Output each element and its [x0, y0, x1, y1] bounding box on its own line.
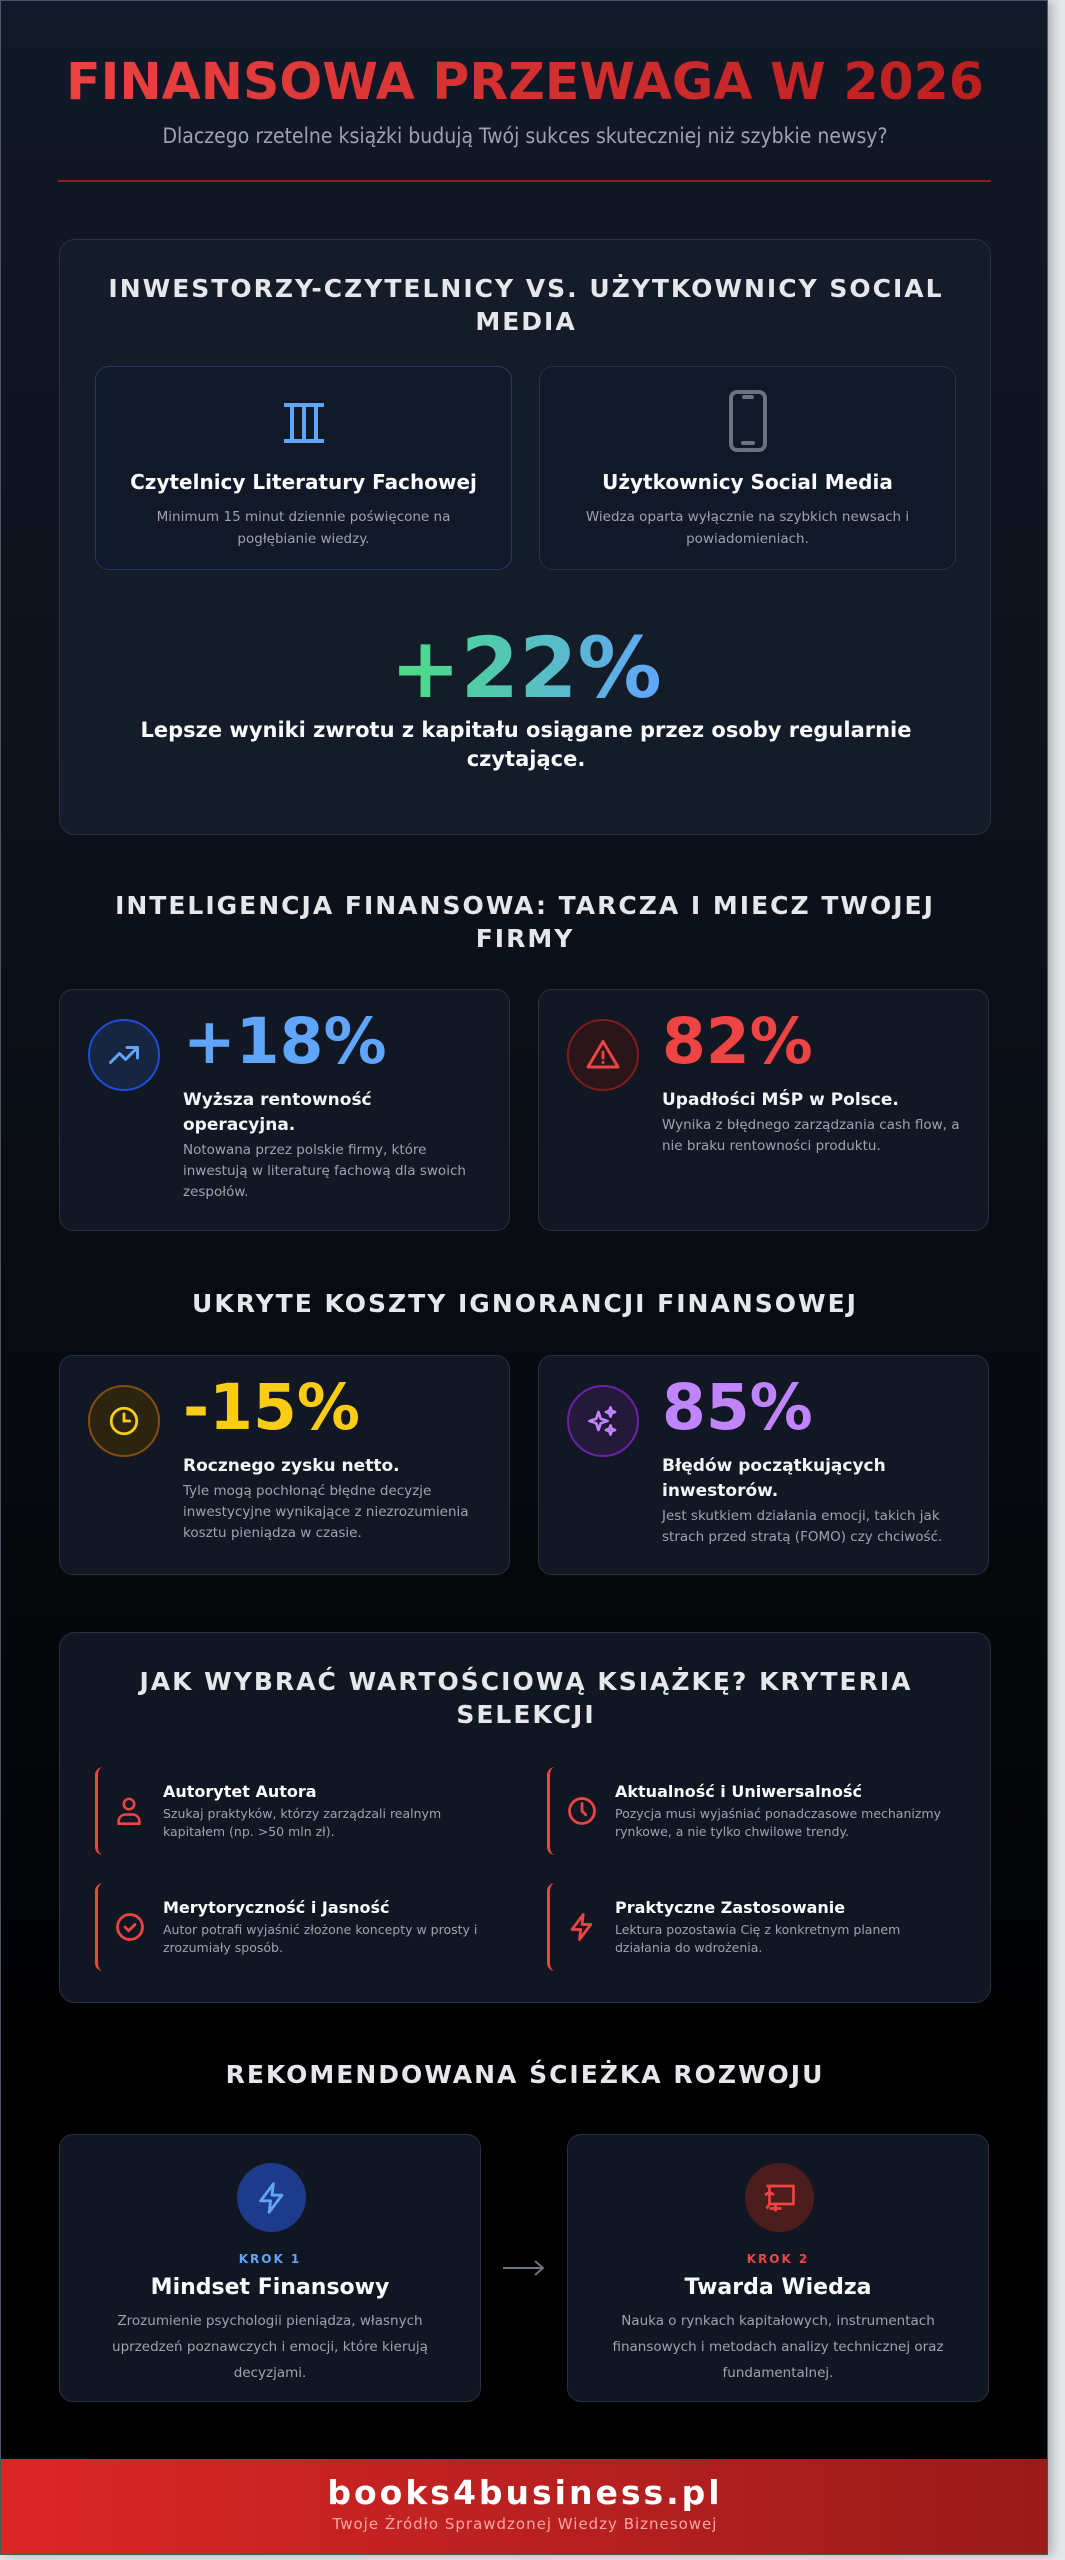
card: 82%	[538, 989, 989, 1231]
criterion: author: Szukaj praktyków, którzy zarządzali realnym kapitałem (np. >50 mln zł).	[163, 1806, 441, 1839]
icon: columns	[284, 403, 324, 443]
panel: criteria	[59, 1632, 991, 2003]
icon: clock	[88, 1385, 160, 1457]
step 2 card: KROK 2	[747, 2252, 809, 2266]
card: +18%: Wyższa rentowność	[183, 1090, 372, 1110]
heading: section 5: REKOMENDOWANA ŚCIEŻKA ROZWOJU	[226, 2060, 824, 2089]
criterion: timeliness: Pozycja musi wyjaśniać ponadczasowe mechanizmy rynkowe, a nie tylko chwilowe trendy.	[615, 1806, 941, 1839]
criterion: timeliness	[547, 1767, 947, 1855]
criterion: clarity: Autor potrafi wyjaśnić złożone koncepty w prosty i zrozumiały sposób.	[163, 1922, 477, 1955]
step 2 card: Twarda Wiedza	[684, 2275, 872, 2300]
step 1 card: KROK 1	[239, 2252, 301, 2266]
card: +18%: +18%	[183, 1005, 387, 1078]
heading: INWESTORZY-CZYTELNICY VS. UŻYTKOWNICY SOCIAL MEDIA	[108, 274, 944, 336]
icon: phone	[729, 390, 767, 452]
criterion: clarity: Merytoryczność i Jasność	[163, 1898, 390, 1917]
criterion: practical: Lektura pozostawia Cię z konkretnym planem działania do wdrożenia.	[615, 1922, 900, 1955]
step 1 card	[59, 2134, 481, 2402]
icon: sparkles	[567, 1385, 639, 1457]
icon: trend	[88, 1019, 160, 1091]
card: readers: Czytelnicy Literatury Fachowej	[130, 470, 477, 494]
icon: warning	[567, 1019, 639, 1091]
heading: JAK WYBRAĆ WARTOŚCIOWĄ KSIĄŻKĘ? KRYTERIA SELEKCJI	[139, 1667, 913, 1729]
stat: +22%: Lepsze wyniki zwrotu z kapitału osiągane przez osoby regularnie czytające.	[140, 718, 912, 771]
heading: section 3: UKRYTE KOSZTY IGNORANCJI FINANSOWEJ	[192, 1289, 858, 1318]
card: 82%: Upadłości MŚP w Polsce.	[662, 1090, 899, 1110]
stat: +22%	[140, 619, 912, 771]
card: 85%: 85%	[662, 1371, 813, 1444]
footer	[1, 2459, 1049, 2556]
icon: presentation	[745, 2163, 814, 2232]
arrow	[503, 2260, 544, 2276]
title: FINANSOWA PRZEWAGA W 2026	[66, 52, 984, 111]
heading: section 2: INTELIGENCJA FINANSOWA: TARCZA I MIECZ TWOJEJ FIRMY	[115, 891, 935, 953]
step 2 card	[567, 2134, 989, 2402]
card: +18%: operacyjna.	[183, 1115, 295, 1135]
card: -15%: -15%	[183, 1371, 360, 1444]
card: 85%	[538, 1355, 989, 1575]
stat: +22%: +22%	[390, 619, 662, 717]
panel: readers vs social media	[59, 239, 991, 835]
card: 85%: Jest skutkiem działania emocji, takich jak strach przed stratą (FOMO) czy chciwość.	[662, 1508, 942, 1545]
card: 85%: Błędów początkujących	[662, 1456, 886, 1476]
card: readers: Minimum 15 minut dziennie poświęcone na pogłębianie wiedzy.	[157, 509, 450, 547]
footer: Twoje Źródło Sprawdzonej Wiedzy Biznesowej	[333, 2515, 717, 2533]
criterion: author	[95, 1767, 495, 1855]
subtitle: Dlaczego rzetelne książki budują Twój sukces skuteczniej niż szybkie newsy?	[162, 124, 888, 148]
step 1 card: Mindset Finansowy	[151, 2275, 389, 2300]
criterion: author: Autorytet Autora	[163, 1782, 317, 1801]
step 1 card: Zrozumienie psychologii pieniądza, własnych uprzedzeń poznawczych i emocji, które kierują decyzjami.	[112, 2313, 428, 2381]
criterion: practical	[547, 1883, 947, 1971]
card: social media	[539, 366, 956, 570]
criterion: timeliness: Aktualność i Uniwersalność	[615, 1782, 862, 1801]
card: -15%: Tyle mogą pochłonąć błędne decyzje inwestycyjne wynikające z niezrozumienia kosztu pieniądza w czasie.	[183, 1483, 469, 1541]
criterion: practical: Praktyczne Zastosowanie	[615, 1898, 845, 1917]
card: +18%	[59, 989, 510, 1231]
card: +18%: Notowana przez polskie firmy, które inwestują w literaturę fachową dla swoich zespołów.	[183, 1142, 466, 1200]
card: 82%: 82%	[662, 1005, 813, 1078]
card: readers	[95, 366, 512, 570]
icon: bolt	[237, 2163, 306, 2232]
card: -15%	[59, 1355, 510, 1575]
footer: books4business.pl	[327, 2473, 723, 2512]
card: social media: Wiedza oparta wyłącznie na szybkich newsach i powiadomieniach.	[586, 509, 909, 547]
card: social media: Użytkownicy Social Media	[602, 470, 893, 494]
card: -15%: Rocznego zysku netto.	[183, 1456, 400, 1476]
card: 85%: inwestorów.	[662, 1481, 778, 1501]
step 2 card: Nauka o rynkach kapitałowych, instrumentach finansowych i metodach analizy technicznej oraz fundamentalnej.	[612, 2313, 944, 2381]
criterion: clarity	[95, 1883, 495, 1971]
card: 82%: Wynika z błędnego zarządzania cash flow, a nie braku rentowności produktu.	[662, 1117, 960, 1154]
